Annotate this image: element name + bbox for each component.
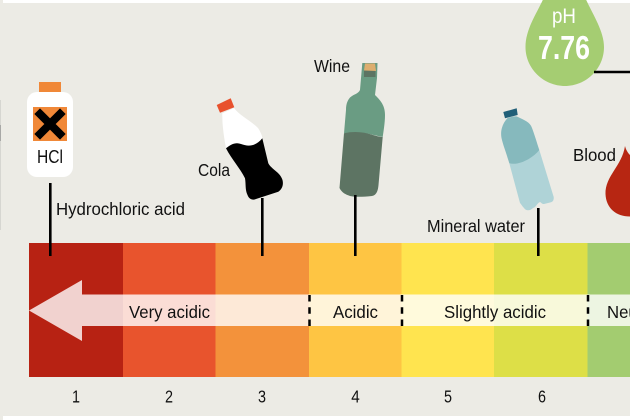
label: slightly acidic: Slightly acidic [444, 302, 546, 322]
icon: blood drop [605, 146, 630, 216]
pointer: mineral water [537, 208, 540, 256]
label: mineral water: Mineral water [427, 216, 525, 236]
scale numbers: 1 [72, 386, 80, 406]
icon: cola bottle [217, 98, 283, 200]
pH scale bar [29, 243, 630, 377]
scale numbers: 4 [351, 386, 360, 406]
scale numbers [72, 386, 546, 406]
scale numbers: 2 [165, 386, 173, 406]
arrow band: acidity scale [29, 280, 630, 341]
dashed dividers [310, 295, 588, 326]
scale numbers: 3 [258, 386, 266, 406]
pointer: hydrochloric acid [49, 183, 52, 256]
pointer: wine [354, 195, 357, 256]
pH value: 7.76 [538, 29, 590, 66]
label: wine: Wine [314, 56, 350, 76]
pH label: pH [552, 5, 576, 28]
icon: HCl bottle [27, 82, 73, 177]
icon: mineral water bottle [501, 108, 554, 210]
pointer: cola [261, 198, 264, 256]
icon: pH drop [526, 0, 630, 86]
icon: wine bottle [340, 63, 385, 197]
HCl label: HCl [37, 147, 63, 167]
label: very acidic: Very acidic [129, 302, 210, 322]
scale numbers: 6 [538, 386, 546, 406]
label: blood: Blood [573, 145, 616, 165]
scale numbers: 5 [444, 386, 452, 406]
pointer ends on bar [49, 243, 540, 256]
label: hydrochloric acid: Hydrochloric acid [56, 199, 185, 219]
label: acidic: Acidic [333, 302, 378, 322]
label: cola: Cola [198, 160, 230, 180]
